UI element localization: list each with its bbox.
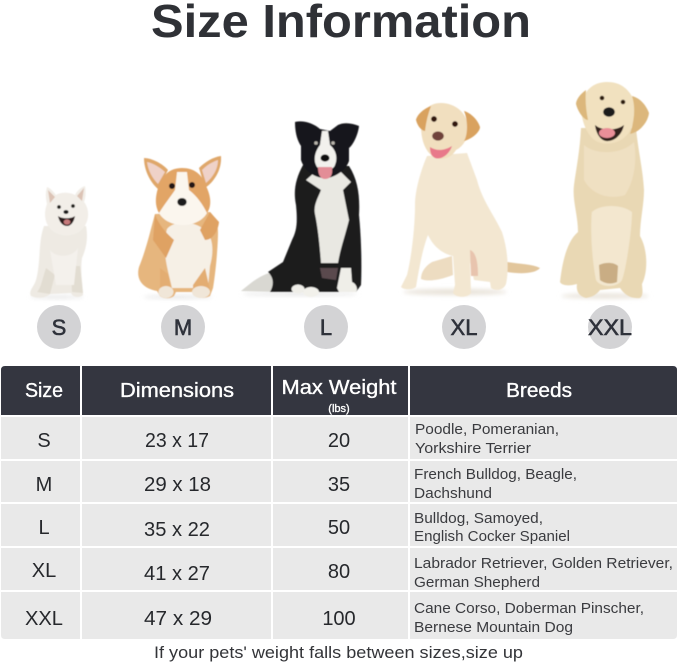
row XL: Labrador Retriever, Golden Retriever,: [414, 555, 673, 572]
size badge M: [161, 305, 205, 349]
size badge S: S: [52, 315, 66, 340]
table header row: (lbs): [328, 403, 350, 415]
size badge XXL: XXL: [588, 315, 632, 340]
row XL: [1, 548, 677, 591]
size badge XL: XL: [451, 315, 477, 340]
size badge L: L: [320, 315, 332, 340]
size table: [1, 366, 677, 639]
row M: French Bulldog, Beagle,: [414, 466, 577, 483]
row S: S: [37, 430, 51, 452]
row S: 23 x 17: [145, 430, 209, 452]
table header row: Size: [25, 380, 63, 402]
dog: corgi: [138, 156, 221, 298]
row XL: 80: [328, 561, 350, 583]
row L: English Cocker Spaniel: [414, 528, 570, 545]
row S: 20: [328, 430, 350, 452]
row XL: XL: [32, 560, 56, 582]
row XL: German Shepherd: [414, 574, 540, 591]
row L: [1, 504, 677, 546]
dog: yellow labrador: [401, 103, 540, 297]
row S: [1, 417, 677, 459]
row M: 29 x 18: [144, 474, 211, 496]
row M: Dachshund: [414, 485, 492, 502]
row L: L: [38, 517, 50, 539]
row XXL: Cane Corso, Doberman Pinscher,: [414, 600, 644, 617]
dog: border collie: [241, 121, 361, 297]
row M: 35: [328, 474, 350, 496]
dog: small white spitz: [30, 186, 88, 298]
size badge S: [37, 305, 81, 349]
size badge XL: [442, 305, 486, 349]
footnote: If your pets' weight falls between sizes,size up: [154, 644, 523, 662]
row L: 50: [328, 517, 350, 539]
table header row: Dimensions: [120, 380, 234, 402]
size badge M: M: [174, 315, 192, 340]
row XXL: 100: [322, 608, 356, 630]
row M: M: [36, 474, 52, 496]
row XXL: [1, 592, 677, 639]
size badge XXL: [588, 305, 632, 349]
row L: 35 x 22: [144, 519, 210, 541]
table header row: Max Weight: [282, 377, 397, 399]
row L: Bulldog, Samoyed,: [414, 510, 543, 527]
table header row: Breeds: [506, 380, 572, 402]
dog: golden retriever: [560, 82, 649, 298]
size badge L: [304, 305, 348, 349]
row M: [1, 461, 677, 502]
row XXL: 47 x 29: [144, 608, 212, 630]
table header row: [1, 366, 677, 415]
row S: Poodle, Pomeranian,: [415, 421, 559, 438]
row XL: 41 x 27: [144, 563, 210, 585]
row XXL: Bernese Mountain Dog: [414, 619, 573, 636]
row XXL: XXL: [25, 608, 63, 630]
row S: Yorkshire Terrier: [415, 440, 531, 457]
